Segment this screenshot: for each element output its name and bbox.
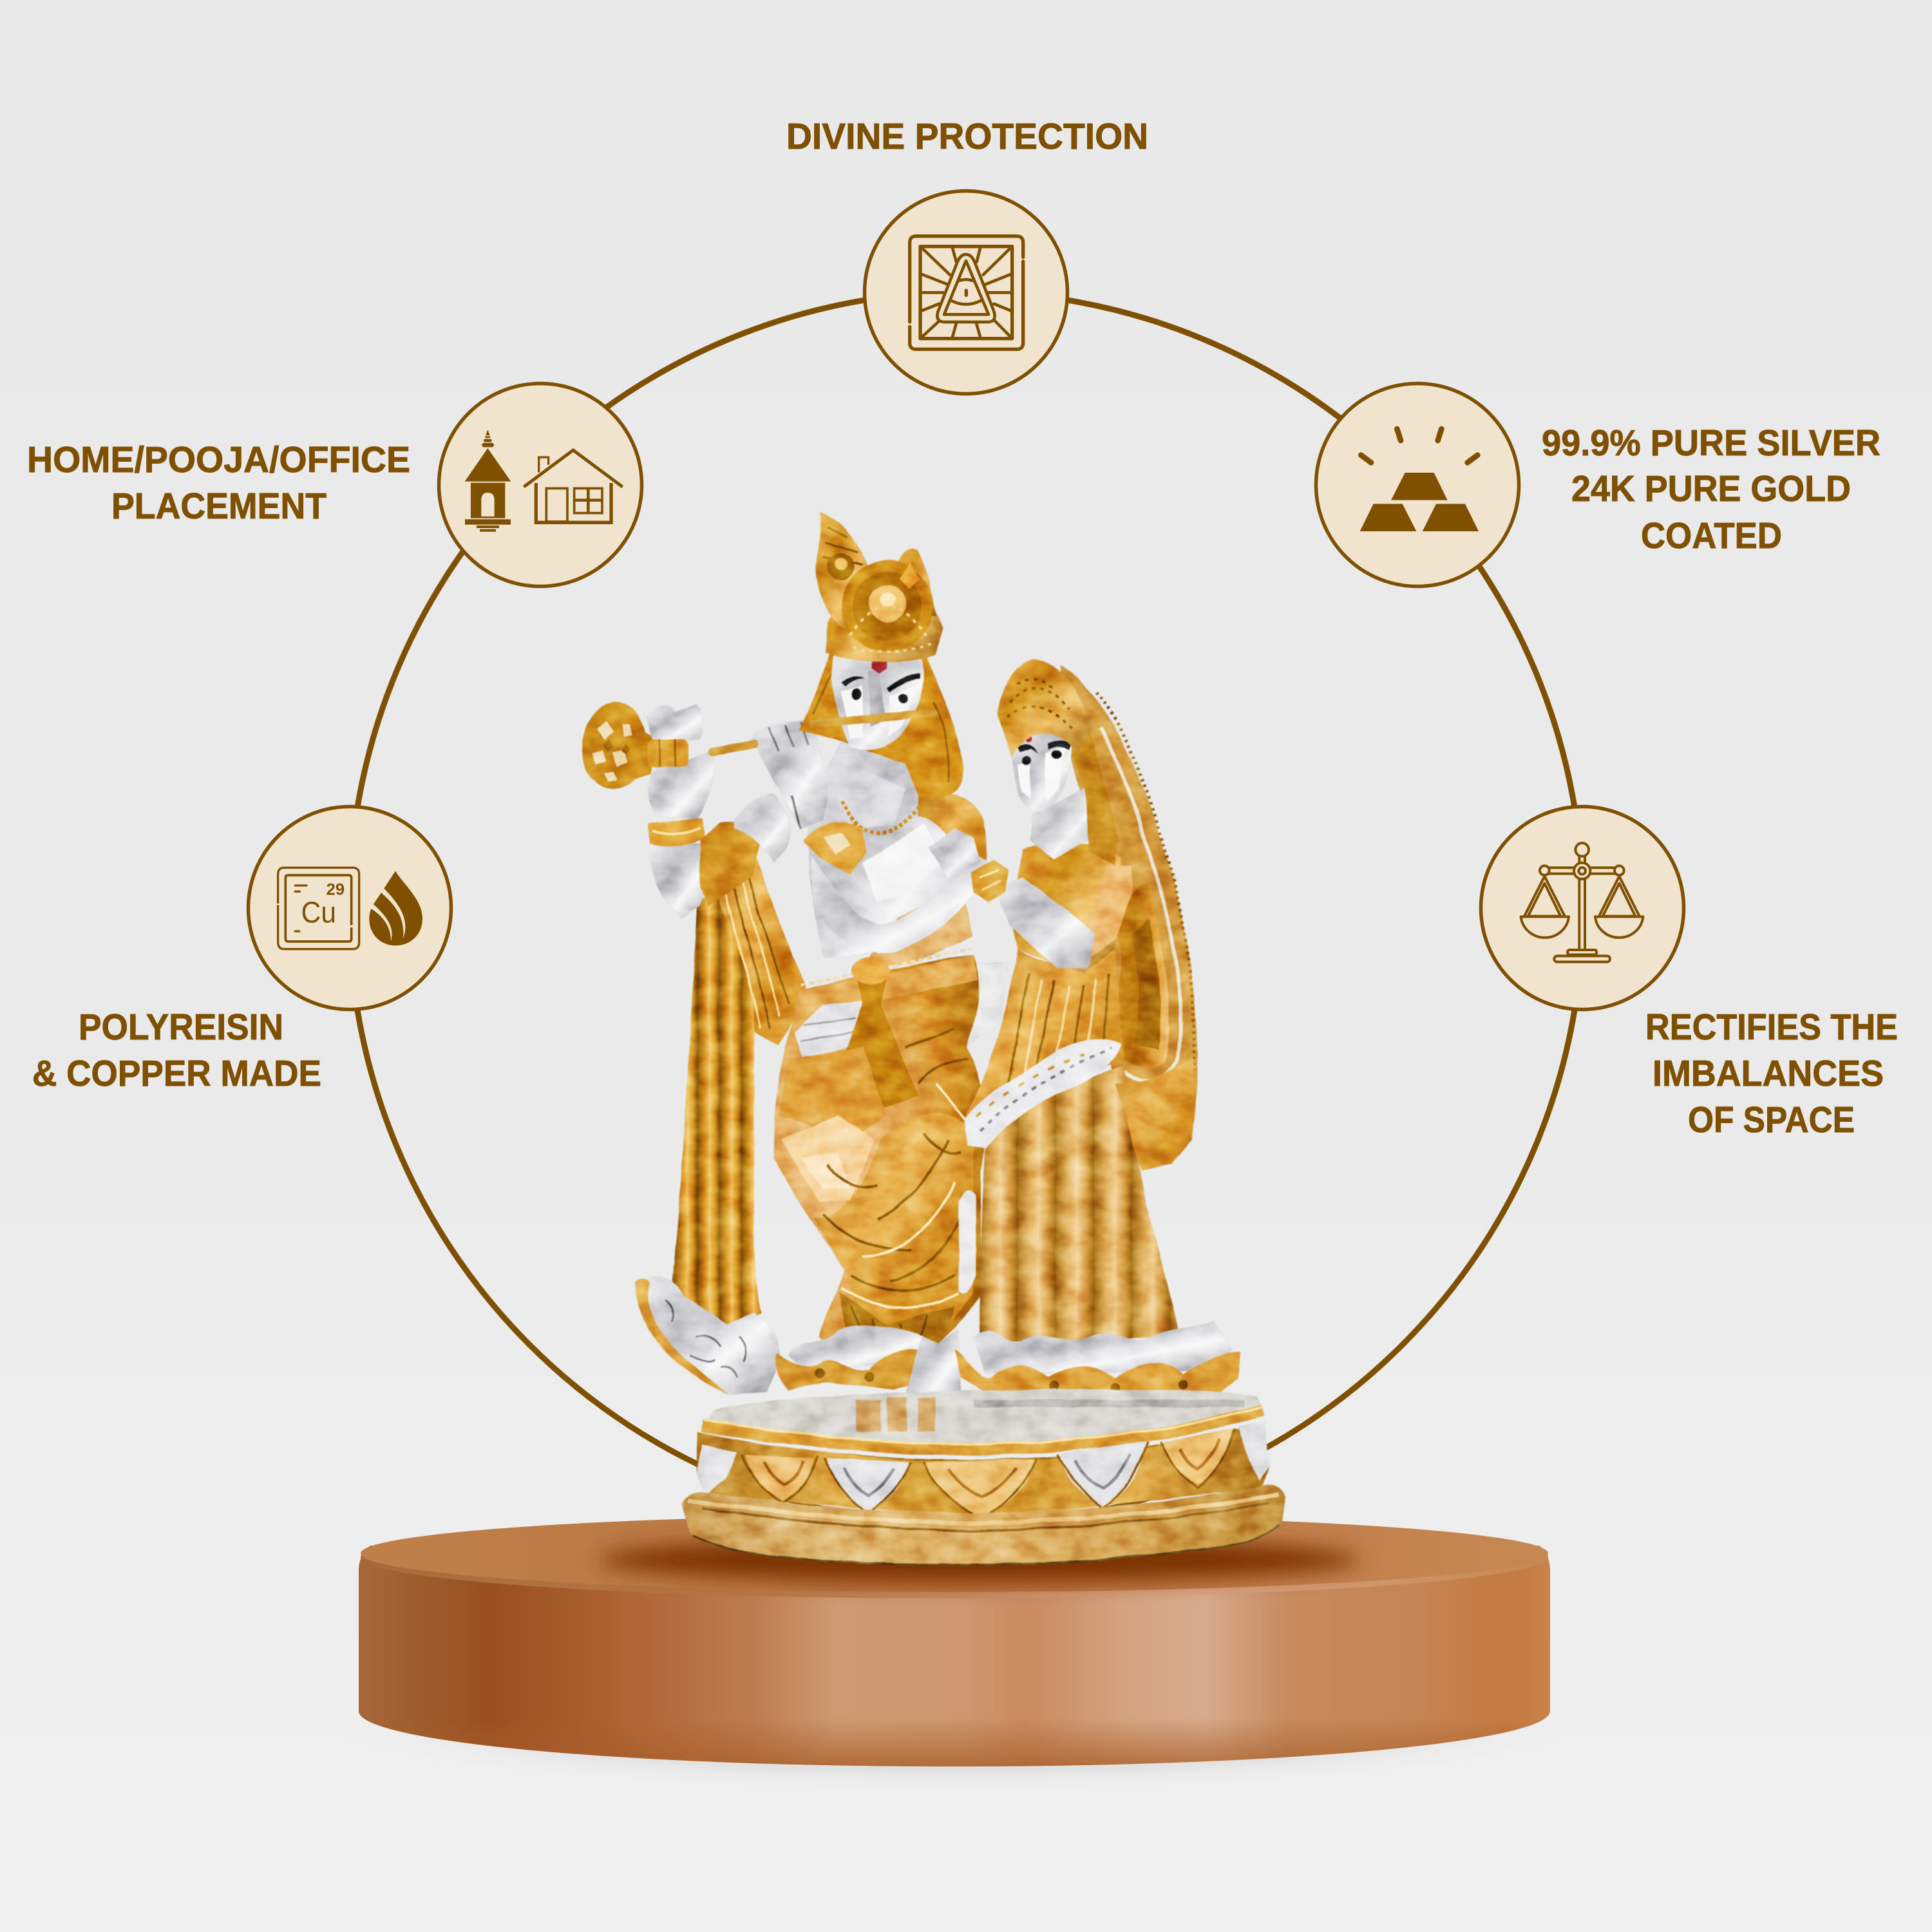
feature: divine protection	[786, 116, 1148, 394]
background slit between figures	[959, 1190, 976, 1294]
mace head	[582, 702, 703, 790]
label: rectifies imbalances: OF SPACE	[1688, 1099, 1855, 1141]
label: divine protection: DIVINE PROTECTION	[786, 116, 1148, 157]
label: pure silver and gold: COATED	[1641, 515, 1782, 556]
krishna hair and head	[799, 579, 964, 798]
icon: copper element and drop: Cu	[301, 896, 336, 929]
krishna foot hem	[775, 1325, 934, 1390]
icon: balance scale	[1521, 843, 1643, 962]
label: placement: PLACEMENT	[111, 486, 327, 527]
flute	[712, 714, 934, 752]
label: polyresin and copper: POLYREISIN	[79, 1007, 283, 1048]
connecting ring	[349, 292, 1583, 1526]
base top plate	[700, 1389, 1264, 1461]
radha hem	[955, 1321, 1241, 1405]
base bottom plate	[681, 1485, 1285, 1565]
krishna crown	[816, 513, 936, 652]
podium	[336, 1515, 1573, 1790]
label: polyresin and copper: & COPPER MADE	[32, 1053, 321, 1094]
label: placement: HOME/POOJA/OFFICE	[27, 439, 410, 480]
icon: copper element and drop: 29	[327, 880, 345, 898]
krishna torso	[752, 719, 993, 967]
label: rectifies imbalances	[1645, 1007, 1898, 1141]
radha veil and inner cave	[1059, 665, 1197, 1171]
label: rectifies imbalances: IMBALANCES	[1653, 1053, 1884, 1094]
label: placement	[27, 439, 410, 527]
icon: eye of providence	[910, 236, 1023, 349]
icon: copper element and drop	[278, 867, 422, 949]
foam and crescent at scarf foot	[634, 1276, 780, 1395]
silver centre	[905, 1329, 961, 1405]
silver lace trim	[963, 1039, 1121, 1148]
feature: pure silver and gold	[1316, 384, 1880, 586]
feature: placement	[27, 384, 641, 586]
scarf	[672, 834, 806, 1337]
radha pleated skirt	[980, 1066, 1180, 1343]
radha head	[998, 659, 1119, 865]
gap between waist and radha	[967, 963, 1008, 1047]
label: pure silver and gold: 24K PURE GOLD	[1571, 468, 1851, 509]
radha upper skirt	[965, 946, 1124, 1140]
feature: polyresin and copper	[32, 806, 451, 1094]
label: polyresin and copper	[32, 1007, 321, 1094]
base decorative lotus band	[696, 1422, 1269, 1518]
feature: rectifies imbalances	[1481, 806, 1898, 1141]
left arm and hand	[648, 749, 790, 918]
icon: gold bars	[1360, 429, 1479, 531]
dhoti	[774, 949, 985, 1368]
label: pure silver and gold	[1542, 422, 1880, 556]
statue	[582, 513, 1285, 1565]
icon: temple and house	[465, 430, 623, 532]
radha torso and arm	[971, 789, 1133, 974]
label: rectifies imbalances: RECTIFIES THE	[1645, 1007, 1898, 1048]
veil drape on skirt	[1115, 1057, 1196, 1171]
label: pure silver and gold: 99.9% PURE SILVER	[1542, 422, 1880, 464]
